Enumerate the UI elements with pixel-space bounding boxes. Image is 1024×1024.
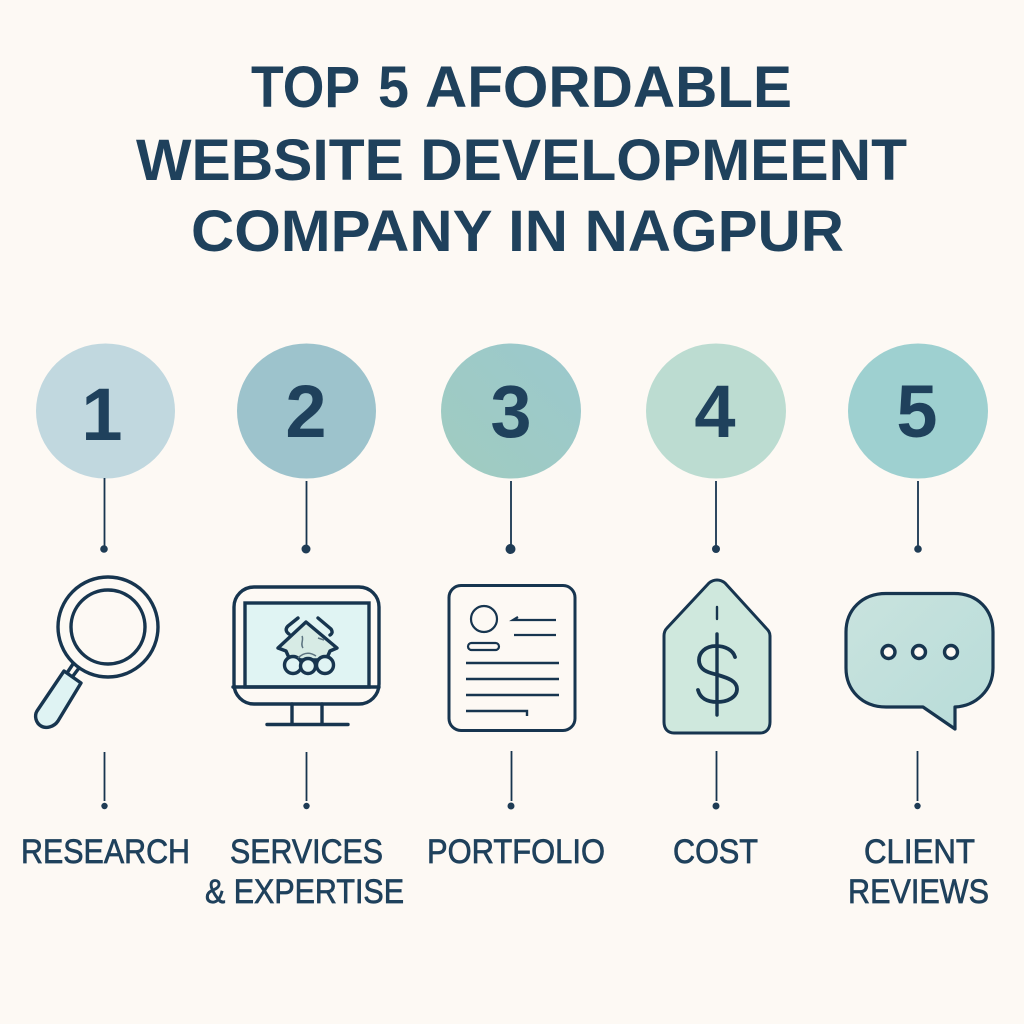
column 3: portfolio (427, 344, 605, 871)
column 4: cost (646, 344, 786, 871)
icon: profile document (449, 586, 575, 730)
label: services and expertise: & EXPERTISE (205, 873, 404, 911)
number badge 5: 5 (896, 370, 938, 453)
connector lower 1 (101, 752, 108, 809)
connector upper 2 (302, 481, 310, 554)
number badge 3 (441, 344, 581, 478)
title: 5 (378, 55, 409, 120)
label: portfolio: PORTFOLIO (427, 833, 605, 871)
connector upper 5 (914, 481, 922, 553)
number badge 3: 3 (490, 370, 532, 453)
icon: monitor (233, 587, 379, 724)
label: cost: COST (673, 833, 758, 871)
label: client reviews (848, 833, 989, 911)
connector lower 5 (914, 751, 921, 809)
label: services and expertise (205, 833, 404, 911)
number badge 2 (237, 344, 376, 478)
connector lower 4 (712, 751, 720, 810)
title: COMPANY IN NAGPUR (191, 199, 844, 264)
icon: house emblem on screen (278, 618, 337, 674)
label: client reviews: CLIENT (864, 833, 975, 871)
title: WEBSITE DEVELOPMEENT (136, 128, 907, 193)
connector upper 3 (506, 481, 516, 554)
connector upper 4 (712, 481, 720, 553)
title (136, 55, 907, 264)
title: AFORDABLE (425, 55, 792, 120)
connector upper 1 (100, 478, 108, 553)
number badge 1: 1 (81, 373, 123, 456)
number badge 1 (36, 344, 175, 478)
icon: price tag (664, 580, 770, 733)
title: TOP (251, 55, 360, 120)
number badge 5 (848, 344, 988, 478)
icon: magnifying glass (36, 577, 158, 727)
connector lower 2 (303, 752, 310, 809)
number badge 2: 2 (285, 370, 327, 453)
column 2: services and expertise (205, 344, 404, 911)
label: research: RESEARCH (21, 833, 190, 871)
connector lower 3 (508, 751, 514, 810)
label: services and expertise: SERVICES (230, 833, 383, 871)
number badge 4 (646, 344, 786, 478)
column 5: client reviews (846, 344, 993, 911)
number badge 4: 4 (694, 370, 736, 453)
icon: speech bubble (846, 594, 993, 729)
label: client reviews: REVIEWS (848, 873, 989, 911)
column 1: research (21, 344, 190, 871)
